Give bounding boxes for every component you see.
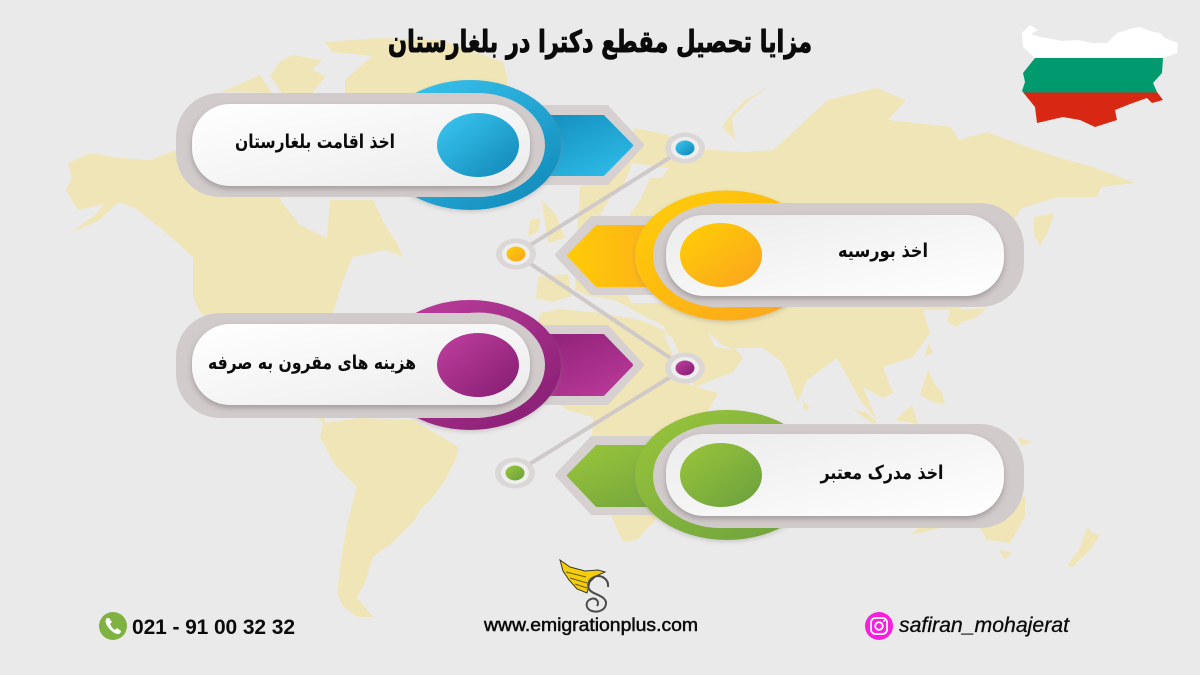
Japan: [947, 308, 987, 327]
label: affordable costs: هزینه های مقرون به صرفه: [208, 352, 416, 374]
node: green: [495, 458, 535, 488]
Greenland: [325, 38, 508, 95]
icon: instagram: [865, 612, 893, 640]
Baltic and Nordic seas: [600, 163, 668, 217]
instagram handle: safiran_mohajerat: [899, 614, 1070, 637]
world map: [66, 38, 1135, 617]
Iberia: [536, 274, 572, 302]
South America: [320, 418, 458, 617]
Novaya Zemlya: [722, 87, 769, 140]
Red Sea: [664, 335, 690, 380]
Canadian arctic islands: [270, 55, 326, 93]
Australia: [910, 490, 1025, 543]
icon: company logo: [560, 560, 608, 612]
phone number: 021 - 91 00 32 32: [132, 616, 295, 639]
SE Asian islands: [925, 343, 933, 357]
icon: phone: [99, 612, 127, 640]
panel: valid degree item: [557, 410, 1024, 540]
panel: scholarship item: [557, 190, 1024, 320]
icon: Bulgaria flag map: [1022, 25, 1178, 127]
label: residence: اخذ اقامت بلغارستان: [235, 131, 395, 153]
node: yellow: [496, 238, 536, 270]
Kamchatka: [1034, 213, 1054, 245]
panel: residence item: [176, 80, 642, 210]
node: blue: [665, 132, 705, 164]
Black Sea: [625, 292, 665, 303]
node: purple: [665, 352, 705, 384]
connector lines: [515, 148, 685, 473]
New Zealand: [1067, 527, 1100, 567]
title: مزایا تحصیل مقطع دکترا در بلغارستان: [388, 25, 812, 60]
Eurasia: [575, 88, 1135, 420]
label: scholarship: اخذ بورسیه: [838, 240, 928, 262]
Persian Gulf: [708, 332, 735, 350]
panel: affordable costs item: [176, 300, 642, 430]
Africa: [532, 309, 718, 542]
website url: www.emigrationplus.com: [483, 615, 698, 635]
North America: [66, 150, 403, 425]
label: valid degree: اخذ مدرک معتبر: [820, 462, 944, 484]
UK and Ireland: [542, 200, 565, 243]
